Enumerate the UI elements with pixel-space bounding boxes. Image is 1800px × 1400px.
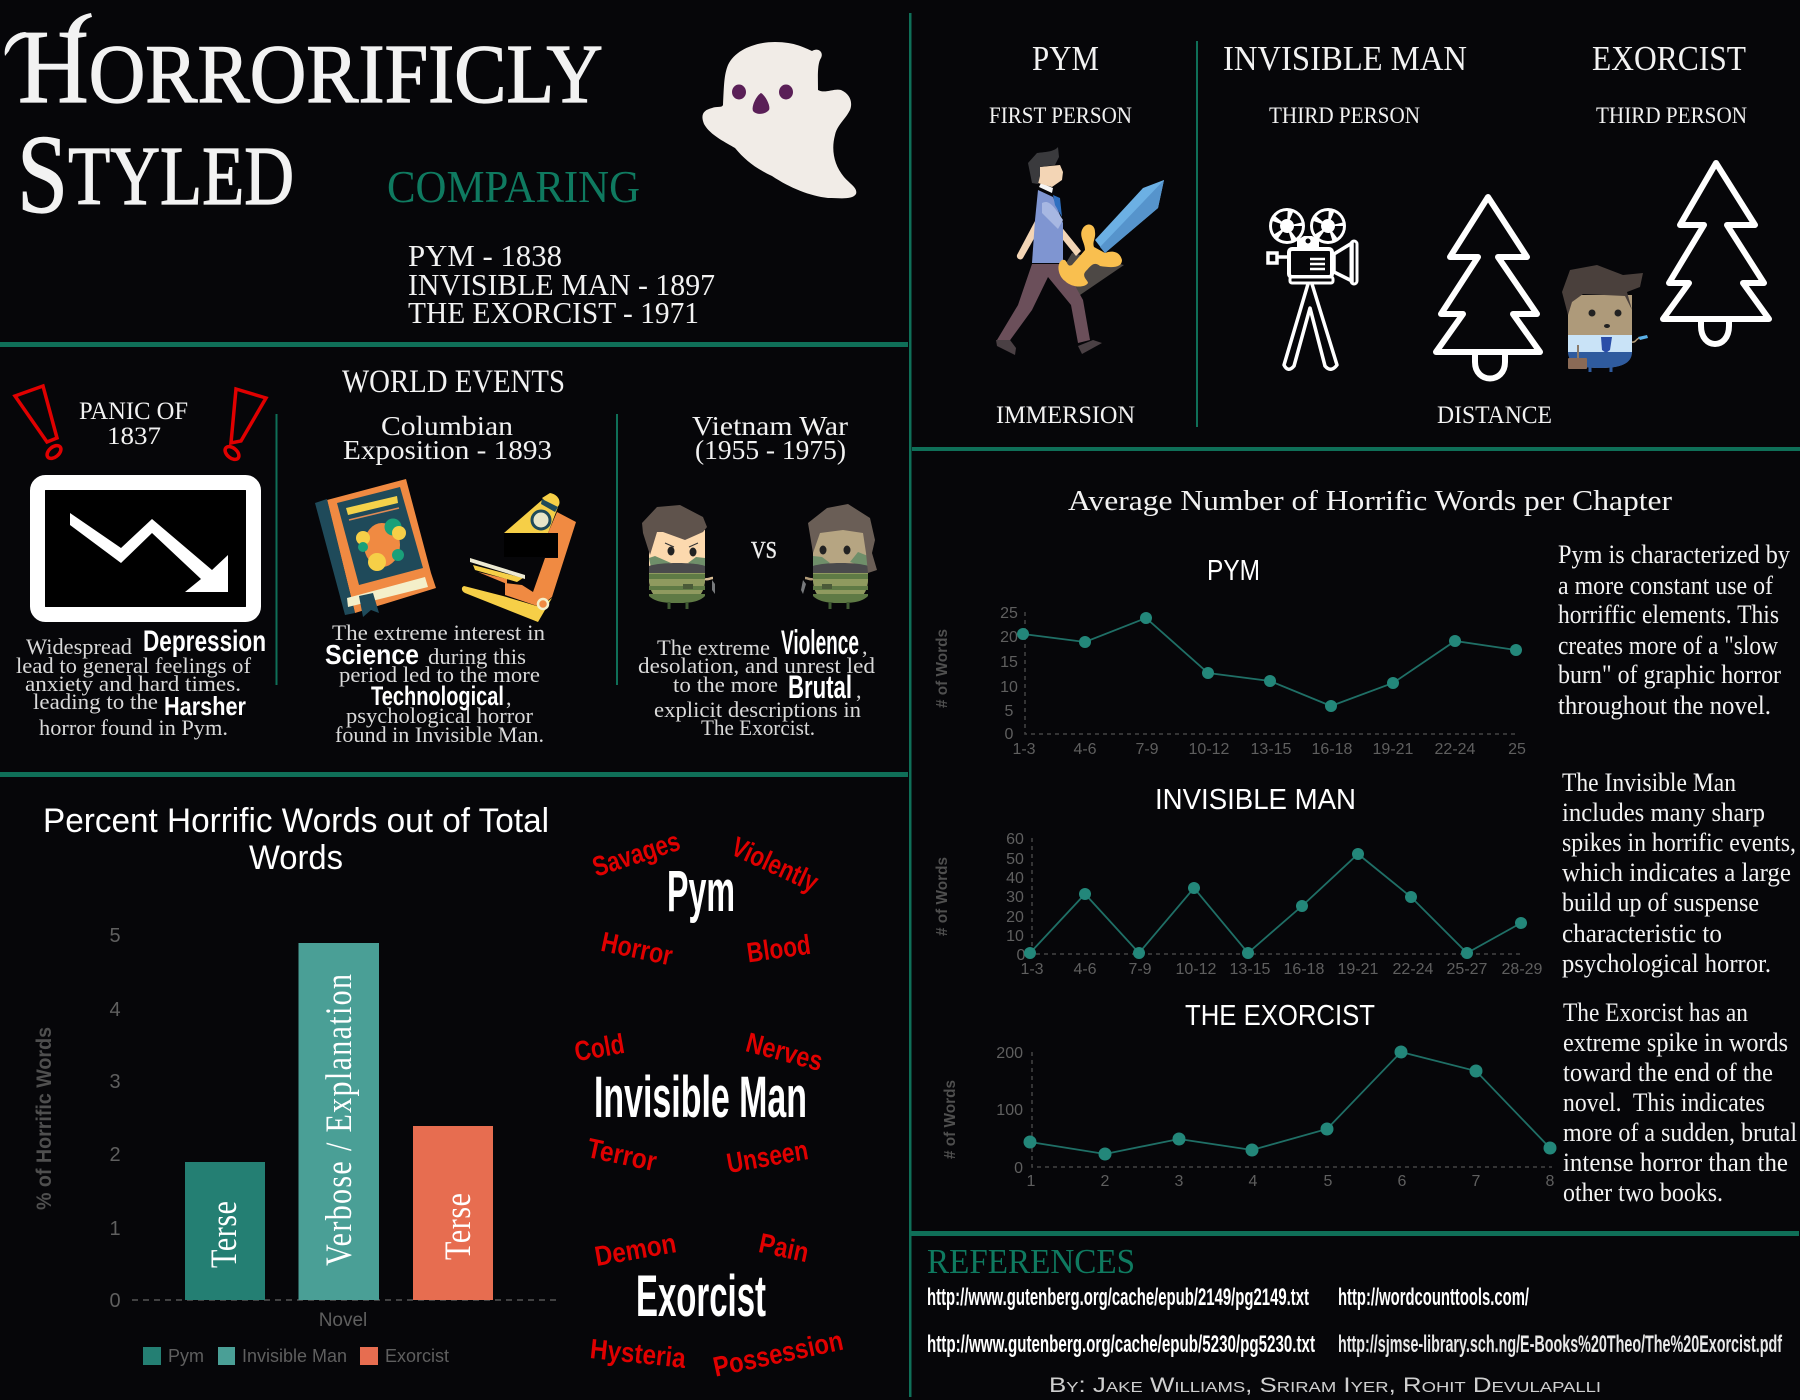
exorcist y axis labels [996,1045,1023,1177]
word cloud: pym: Savages [588,825,684,883]
word cloud: invisible man: Unseen [724,1134,810,1179]
pym axis labels [1000,605,1526,758]
invisible man commentary: build up of suspense [1562,888,1759,917]
vietnam description: desolation, and unrest led [638,653,875,678]
reference links: http://www.gutenberg.org/cache/epub/5230/pg5230.txt [927,1331,1315,1358]
reference links: http://wordcounttools.com/ [1338,1284,1529,1311]
book list: THE EXORCIST - 1971 [408,295,699,330]
panic heading [79,398,188,450]
columbian description: psychological horror [346,703,534,728]
reference links: http://www.gutenberg.org/cache/epub/2149/pg2149.txt [927,1284,1309,1311]
legend: Invisible Man [242,1346,347,1366]
panic heading: 1837 [107,423,161,450]
label: immersion: IMMERSION [996,402,1135,429]
legend [143,1346,449,1366]
pym chart title: PYM [1207,555,1260,587]
person labels: THIRD PERSON [1269,103,1420,128]
invisible man axis labels: 25-27 [1447,961,1488,978]
legend: Exorcist [385,1346,449,1366]
pym axis labels: 13-15 [1251,741,1292,758]
panic description: horror found in Pym. [39,715,228,740]
title: S [17,113,68,237]
exorcist y axis labels: 200 [996,1045,1023,1062]
columbian description: Technological [371,681,504,711]
pym axis labels: 19-21 [1373,741,1414,758]
panic heading: PANIC OF [79,398,188,425]
pym axis labels: 15 [1000,654,1018,671]
exorcist commentary: intense horror than the [1563,1148,1788,1177]
columbian description: , [506,685,512,710]
panel: invisible man line chart [934,768,1796,978]
word cloud: pym: Violently [727,831,824,898]
bar label: verbose: Verbose / Explanation [319,974,360,1266]
pym axis labels: 4-6 [1073,741,1097,758]
icon: microscope [462,493,576,622]
panic description: leading to the [33,689,158,714]
perspective headings: PYM [1032,39,1099,78]
exorcist x axis labels: 1 [1027,1173,1036,1190]
pym commentary: horriffic elements. This [1558,600,1779,629]
columbian description: found in Invisible Man. [335,722,544,747]
exorcist x axis labels: 3 [1175,1173,1184,1190]
y axis ticks: 4 [109,999,121,1021]
pym axis labels: 10 [1000,679,1018,696]
exorcist commentary: extreme spike in words [1563,1028,1788,1057]
pym line [1017,612,1522,712]
word cloud: pym: Pym [667,859,735,924]
icon: book [315,479,436,617]
title: TYLED [68,130,294,223]
exorcist line [1024,1046,1556,1160]
y axis ticks [109,925,121,1312]
pym axis labels: 25 [1000,605,1018,622]
icon: tree right [1663,163,1769,344]
pym axis labels: 0 [1005,726,1014,743]
heading: comparing: COMPARING [387,161,640,212]
pym axis labels: 10-12 [1189,741,1230,758]
invisible man axis labels: 30 [1006,889,1024,906]
exorcist commentary [1563,998,1797,1207]
icon: film camera on tripod [1268,208,1357,369]
vietnam heading: Vietnam War [692,411,848,441]
icon: right exclamation mark [223,389,266,462]
exorcist commentary: novel. This indicates [1563,1088,1765,1117]
exorcist x axis labels: 2 [1101,1173,1110,1190]
word cloud: invisible man: Nerves [743,1027,826,1077]
invisible man axis labels: 22-24 [1393,961,1434,978]
word cloud: exorcist: Pain [756,1227,812,1268]
exorcist x axis labels [1027,1173,1555,1190]
pym axis labels: 22-24 [1435,741,1476,758]
invisible man y axis title: # of Words [934,857,951,936]
exorcist commentary: toward the end of the [1563,1058,1773,1087]
pym commentary: throughout the novel. [1558,691,1771,720]
pym axis labels: 20 [1000,629,1018,646]
word cloud: invisible man: Invisible Man [594,1065,807,1130]
vietnam heading: (1955 - 1975) [695,435,846,465]
invisible man axis labels: 1-3 [1020,961,1044,978]
columbian heading: Exposition - 1893 [343,435,552,465]
word cloud: exorcist [589,1227,846,1383]
exorcist y axis labels: 0 [1014,1160,1023,1177]
columbian heading [343,411,552,465]
perspective headings: EXORCIST [1592,39,1746,78]
panic description: Depression [143,625,266,658]
invisible man axis labels: 19-21 [1338,961,1379,978]
reference links [927,1284,1783,1358]
legend: Pym [168,1346,204,1366]
exorcist x axis labels: 5 [1324,1173,1333,1190]
x axis label: Novel [319,1310,367,1331]
word cloud: invisible man [572,1027,826,1179]
y axis ticks: 5 [109,925,121,947]
y axis ticks: 3 [109,1071,121,1093]
vietnam description: , [856,678,862,703]
pym y axis title: # of Words [934,629,951,708]
panic description: Harsher [164,691,246,721]
invisible man line [1024,848,1527,959]
vietnam description: to the more [673,672,778,697]
columbian description: Science [325,639,419,670]
word cloud: exorcist: Possession [710,1325,846,1383]
exorcist chart title: THE EXORCIST [1185,1000,1375,1032]
word cloud: exorcist: Hysteria [589,1333,688,1374]
title [5,8,603,237]
bar chart title [43,802,549,877]
panel: pym line chart [934,540,1790,758]
exorcist x axis labels: 4 [1249,1173,1258,1190]
label: distance: DISTANCE [1437,402,1552,429]
pym commentary: Pym is characterized by [1558,540,1790,569]
y axis ticks: 0 [109,1290,121,1312]
title: HORRORIFICLY [18,8,603,125]
icon: soldier right [801,504,877,609]
icon: falling chart [38,482,254,614]
word cloud: pym: Blood [745,929,813,968]
pym axis labels: 1-3 [1012,741,1036,758]
exorcist x axis labels: 6 [1398,1173,1407,1190]
icon: person with sword [996,147,1164,355]
panic description: anxiety and hard times. [25,671,241,696]
vietnam heading [692,411,848,465]
bar chart title: Percent Horrific Words out of Total [43,802,549,840]
invisible man commentary: psychological horror. [1562,949,1771,978]
bar label: terse: Terse [204,1201,245,1268]
pym axis labels: 25 [1508,741,1526,758]
exorcist x axis labels: 8 [1546,1173,1555,1190]
invisible man axis labels: 10-12 [1176,961,1217,978]
bar: pym [185,1162,265,1300]
word cloud: invisible man: Terror [585,1132,660,1177]
pym axis labels: 16-18 [1312,741,1353,758]
byline: By: Jake Williams, Sriram Iyer, Rohit Devulapalli [1049,1374,1601,1397]
pym commentary: burn" of graphic horror [1558,660,1781,689]
panel: columbian exposition [315,411,576,747]
pym axis labels: 7-9 [1135,741,1159,758]
invisible man axis labels: 10 [1006,928,1024,945]
book list: INVISIBLE MAN - 1897 [408,267,715,302]
exorcist commentary: other two books. [1563,1178,1723,1207]
exorcist y axis labels: 100 [996,1102,1023,1119]
invisible man commentary: characteristic to [1562,919,1722,948]
panel: narrative perspective [989,39,1769,429]
perspective headings [1032,39,1746,78]
bar chart title: Words [249,839,343,877]
book list: PYM - 1838 [408,238,562,273]
columbian description [325,620,545,747]
word cloud: pym: Horror [599,926,675,971]
panel: references [927,1242,1783,1397]
person labels: FIRST PERSON [989,103,1132,128]
invisible man axis labels: 7-9 [1128,961,1152,978]
vietnam description: Violence [781,624,859,662]
word cloud: exorcist: Demon [592,1227,678,1272]
pym commentary [1558,540,1790,720]
columbian description: The extreme interest in [332,620,545,645]
exorcist y axis title: # of Words [942,1080,959,1159]
bar: exorcist [413,1126,493,1300]
vietnam description: The Exorcist. [701,715,815,740]
pym axis labels: 5 [1005,703,1014,720]
vs label: VS [751,538,777,564]
invisible man axis labels: 20 [1006,909,1024,926]
word cloud: exorcist: Exorcist [636,1264,766,1329]
icon: tree left [1436,197,1540,378]
perspective headings: INVISIBLE MAN [1223,39,1467,78]
vietnam description [638,624,875,740]
exorcist x axis labels: 7 [1472,1173,1481,1190]
pym commentary: a more constant use of [1558,571,1773,600]
invisible man commentary: includes many sharp [1562,798,1765,827]
y axis ticks: 2 [109,1144,121,1166]
vietnam description: explicit descriptions in [654,697,861,722]
bar: invisible man [298,943,379,1300]
pym commentary: creates more of a "slow [1558,631,1778,660]
vietnam description: , [862,634,868,659]
panel: panic of 1837 [15,386,266,740]
invisible man axis labels: 60 [1006,831,1024,848]
invisible man commentary [1562,768,1796,978]
person labels: THIRD PERSON [1596,103,1747,128]
y axis title: % of Horrific Words [33,1027,56,1210]
invisible man axis labels: 16-18 [1284,961,1325,978]
word cloud: pym [588,825,824,971]
invisible man chart title: INVISIBLE MAN [1155,784,1356,816]
columbian heading: Columbian [381,411,514,441]
invisible man axis labels: 0 [1017,947,1026,964]
bar label: terse: Terse [438,1193,479,1260]
invisible man axis labels: 40 [1006,870,1024,887]
person labels [989,103,1747,128]
icon: left exclamation mark [15,386,63,461]
y axis ticks: 1 [109,1218,121,1240]
panic description [16,625,266,740]
invisible man commentary: which indicates a large [1562,858,1791,887]
columbian description: period led to the more [339,662,540,687]
icon: soldier left [642,505,715,609]
icon: ghost [702,42,856,198]
invisible man axis labels: 50 [1006,851,1024,868]
panic description: Widespread [26,634,132,659]
panic description: lead to general feelings of [16,653,252,678]
invisible man axis labels [1006,831,1543,978]
invisible man commentary: The Invisible Man [1562,768,1736,797]
invisible man axis labels: 28-29 [1502,961,1543,978]
columbian description: during this [428,644,526,669]
references heading: REFERENCES [927,1242,1135,1281]
icon: businessman [1562,265,1648,372]
heading: world events: WORLD EVENTS [342,364,565,400]
exorcist commentary: The Exorcist has an [1563,998,1748,1027]
panel: percent horrific words bar chart [33,802,558,1366]
heading: average horrific words: Average Number of Horrific Words per Chapter [1068,485,1672,517]
invisible man axis labels: 4-6 [1073,961,1097,978]
vietnam description: The extreme [657,635,770,660]
invisible man axis labels: 13-15 [1230,961,1271,978]
panel: exorcist line chart [942,998,1797,1207]
book list [408,238,715,330]
panel: vietnam war [638,411,877,740]
vietnam description: Brutal [788,669,852,705]
word cloud: invisible man: Cold [572,1028,627,1067]
